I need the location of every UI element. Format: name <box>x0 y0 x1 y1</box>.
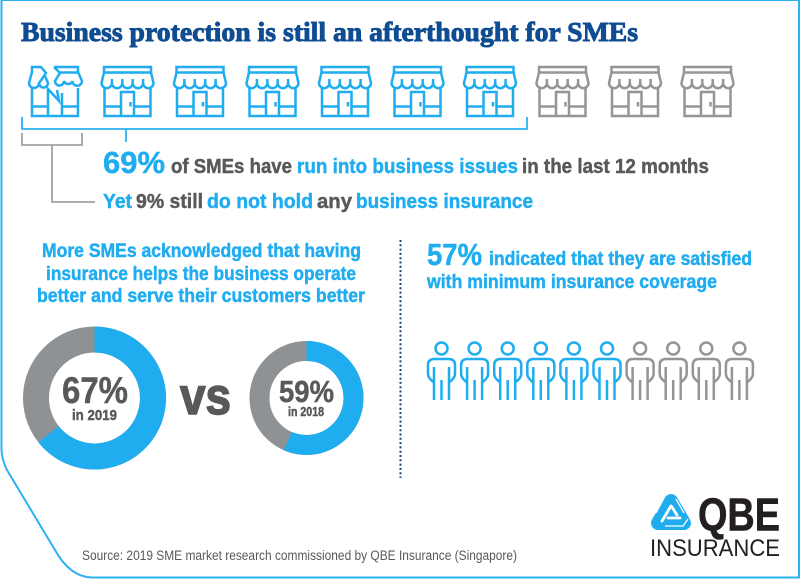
icon: grey shop 2 <box>609 67 661 116</box>
text: vs: vs <box>180 368 231 426</box>
icon: grey person 3 <box>693 342 720 400</box>
icon row: people <box>428 342 753 400</box>
title: Business protection is still an afterthought for SMEs <box>21 16 638 47</box>
text: 69% statistic: 69% <box>103 145 165 180</box>
text: 9% statistic: 9% still <box>136 190 203 213</box>
icon: blue person 4 <box>527 342 554 400</box>
donut chart: 67% in 2019 <box>36 340 153 456</box>
text: 69% statistic: in the last 12 months <box>522 155 709 178</box>
text: 9% statistic <box>103 190 533 213</box>
donut chart: 59% in 2018: 59% <box>279 374 334 409</box>
icon: QBE triangle mark <box>656 498 688 526</box>
text: 69% statistic <box>103 145 709 180</box>
icon: blue person 2 <box>461 342 488 400</box>
text: 9% statistic: do not hold <box>207 190 313 213</box>
text: 69% statistic: of SMEs have <box>171 155 292 178</box>
icon: blue shop 6 <box>464 67 516 116</box>
donut chart: 67% in 2019: 67% <box>62 370 128 411</box>
heading: acknowledgement of insurance: better and serve their customers better <box>37 286 366 307</box>
grey bracket for 9% <box>22 133 95 202</box>
text: 9% statistic: Yet <box>103 190 132 213</box>
text: 69% statistic: run into business issues <box>297 155 518 178</box>
QBE logo <box>650 488 780 562</box>
text: QBE wordmark: QBE <box>698 488 780 540</box>
icon: blue shop 3 <box>246 67 298 116</box>
icon: damaged shop <box>29 67 82 116</box>
text: 9% statistic: any <box>317 190 353 213</box>
icon: blue person 1 <box>428 342 455 400</box>
icon: blue shop 5 <box>392 67 444 116</box>
donut chart: 67% in 2019: in 2019 <box>72 407 117 424</box>
icon: blue person 5 <box>560 342 587 400</box>
icon: blue person 6 <box>594 342 620 400</box>
icon row: shops <box>29 67 734 116</box>
icon: blue shop 4 <box>319 67 371 116</box>
text: 57% statistic <box>426 237 752 293</box>
text: INSURANCE wordmark: INSURANCE <box>650 535 780 562</box>
heading: acknowledgement of insurance: More SMEs acknowledged that having <box>42 241 361 262</box>
donut chart: 59% in 2018 <box>260 351 354 445</box>
icon: blue shop 1 <box>102 67 154 116</box>
icon: grey person 1 <box>627 342 654 400</box>
icon: blue person 3 <box>494 342 521 400</box>
source note: Source: 2019 SME market research commissioned by QBE Insurance (Singapore) <box>82 548 517 563</box>
icon: blue shop 2 <box>174 67 226 116</box>
icon: grey person 4 <box>726 342 753 400</box>
heading: acknowledgement of insurance <box>37 241 366 307</box>
donut chart: 59% in 2018: in 2018 <box>288 405 324 419</box>
text: 57% statistic: 57% <box>427 237 482 272</box>
text: 9% statistic: business insurance <box>356 190 533 213</box>
icon: grey shop 1 <box>536 67 588 116</box>
icon: grey person 2 <box>660 342 687 400</box>
heading: acknowledgement of insurance: insurance helps the business operate <box>46 264 356 285</box>
blue bracket for 69% <box>22 117 527 142</box>
text: 57% statistic: indicated that they are satisfied <box>489 248 752 270</box>
text: 57% statistic: with minimum insurance coverage <box>426 271 717 293</box>
icon: grey shop 3 <box>682 67 734 116</box>
